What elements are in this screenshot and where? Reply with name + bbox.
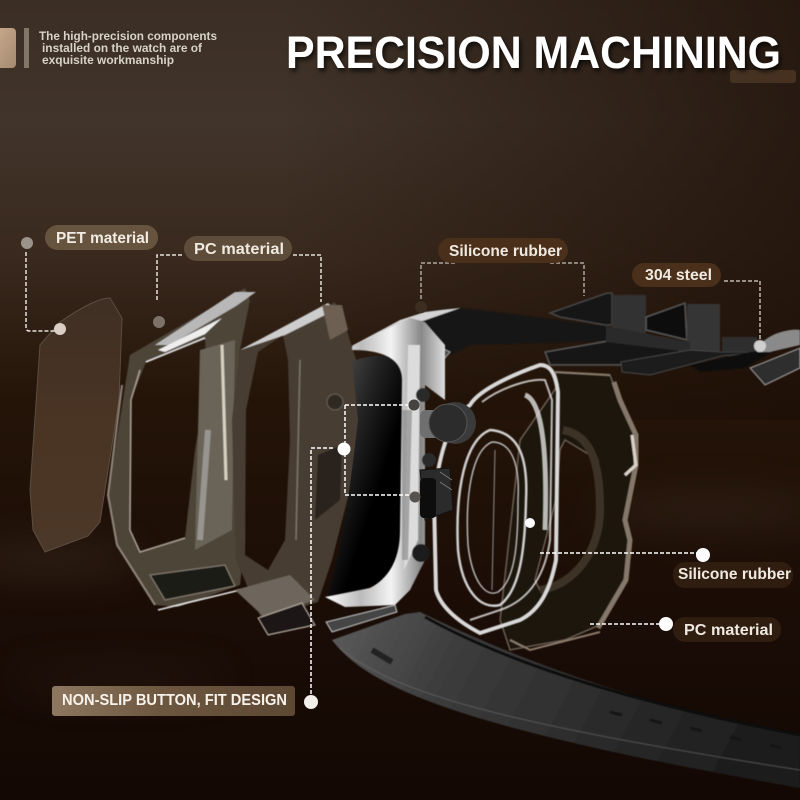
- crown and button: [420, 402, 476, 520]
- PC front bumper: [108, 288, 256, 610]
- label: 304 steel: 304 steel: [645, 267, 712, 284]
- label: Silicone rubber right: [673, 562, 793, 588]
- clear silicone ring frame: [434, 365, 558, 633]
- callout dots: [21, 237, 710, 709]
- label: Silicone rubber top: Silicone rubber: [449, 243, 562, 260]
- label: non-slip button: NON-SLIP BUTTON, FIT DESIGN: [62, 692, 287, 709]
- back case: [500, 372, 637, 650]
- label: Silicone rubber top: [438, 238, 568, 263]
- label: PET material: [45, 225, 158, 250]
- swatch: tan block: [0, 28, 16, 68]
- bottom strap: [326, 605, 800, 788]
- PC back bumper: [232, 302, 362, 635]
- PET lens: [30, 298, 122, 552]
- label: PC material right: PC material: [684, 622, 773, 639]
- label: non-slip button: [52, 686, 295, 716]
- label: PC material right: [673, 617, 781, 642]
- silver watch case: [325, 318, 445, 607]
- divider bar: [24, 28, 29, 68]
- intro text: The high-precision components: [39, 29, 217, 43]
- label: PC material top: [184, 236, 292, 261]
- intro text: [39, 29, 217, 67]
- label: PET material: PET material: [56, 230, 149, 247]
- intro text: exquisite workmanship: [42, 53, 174, 67]
- title: PRECISION MACHINING: [286, 27, 781, 78]
- top strap and 304 steel connectors: [352, 293, 800, 385]
- black watch screen: [326, 356, 405, 600]
- callout lines: [26, 252, 760, 695]
- intro text: installed on the watch are of: [42, 41, 203, 55]
- label: PC material top: PC material: [194, 241, 284, 258]
- label: 304 steel: [632, 263, 721, 287]
- label: Silicone rubber right: Silicone rubber: [678, 566, 791, 583]
